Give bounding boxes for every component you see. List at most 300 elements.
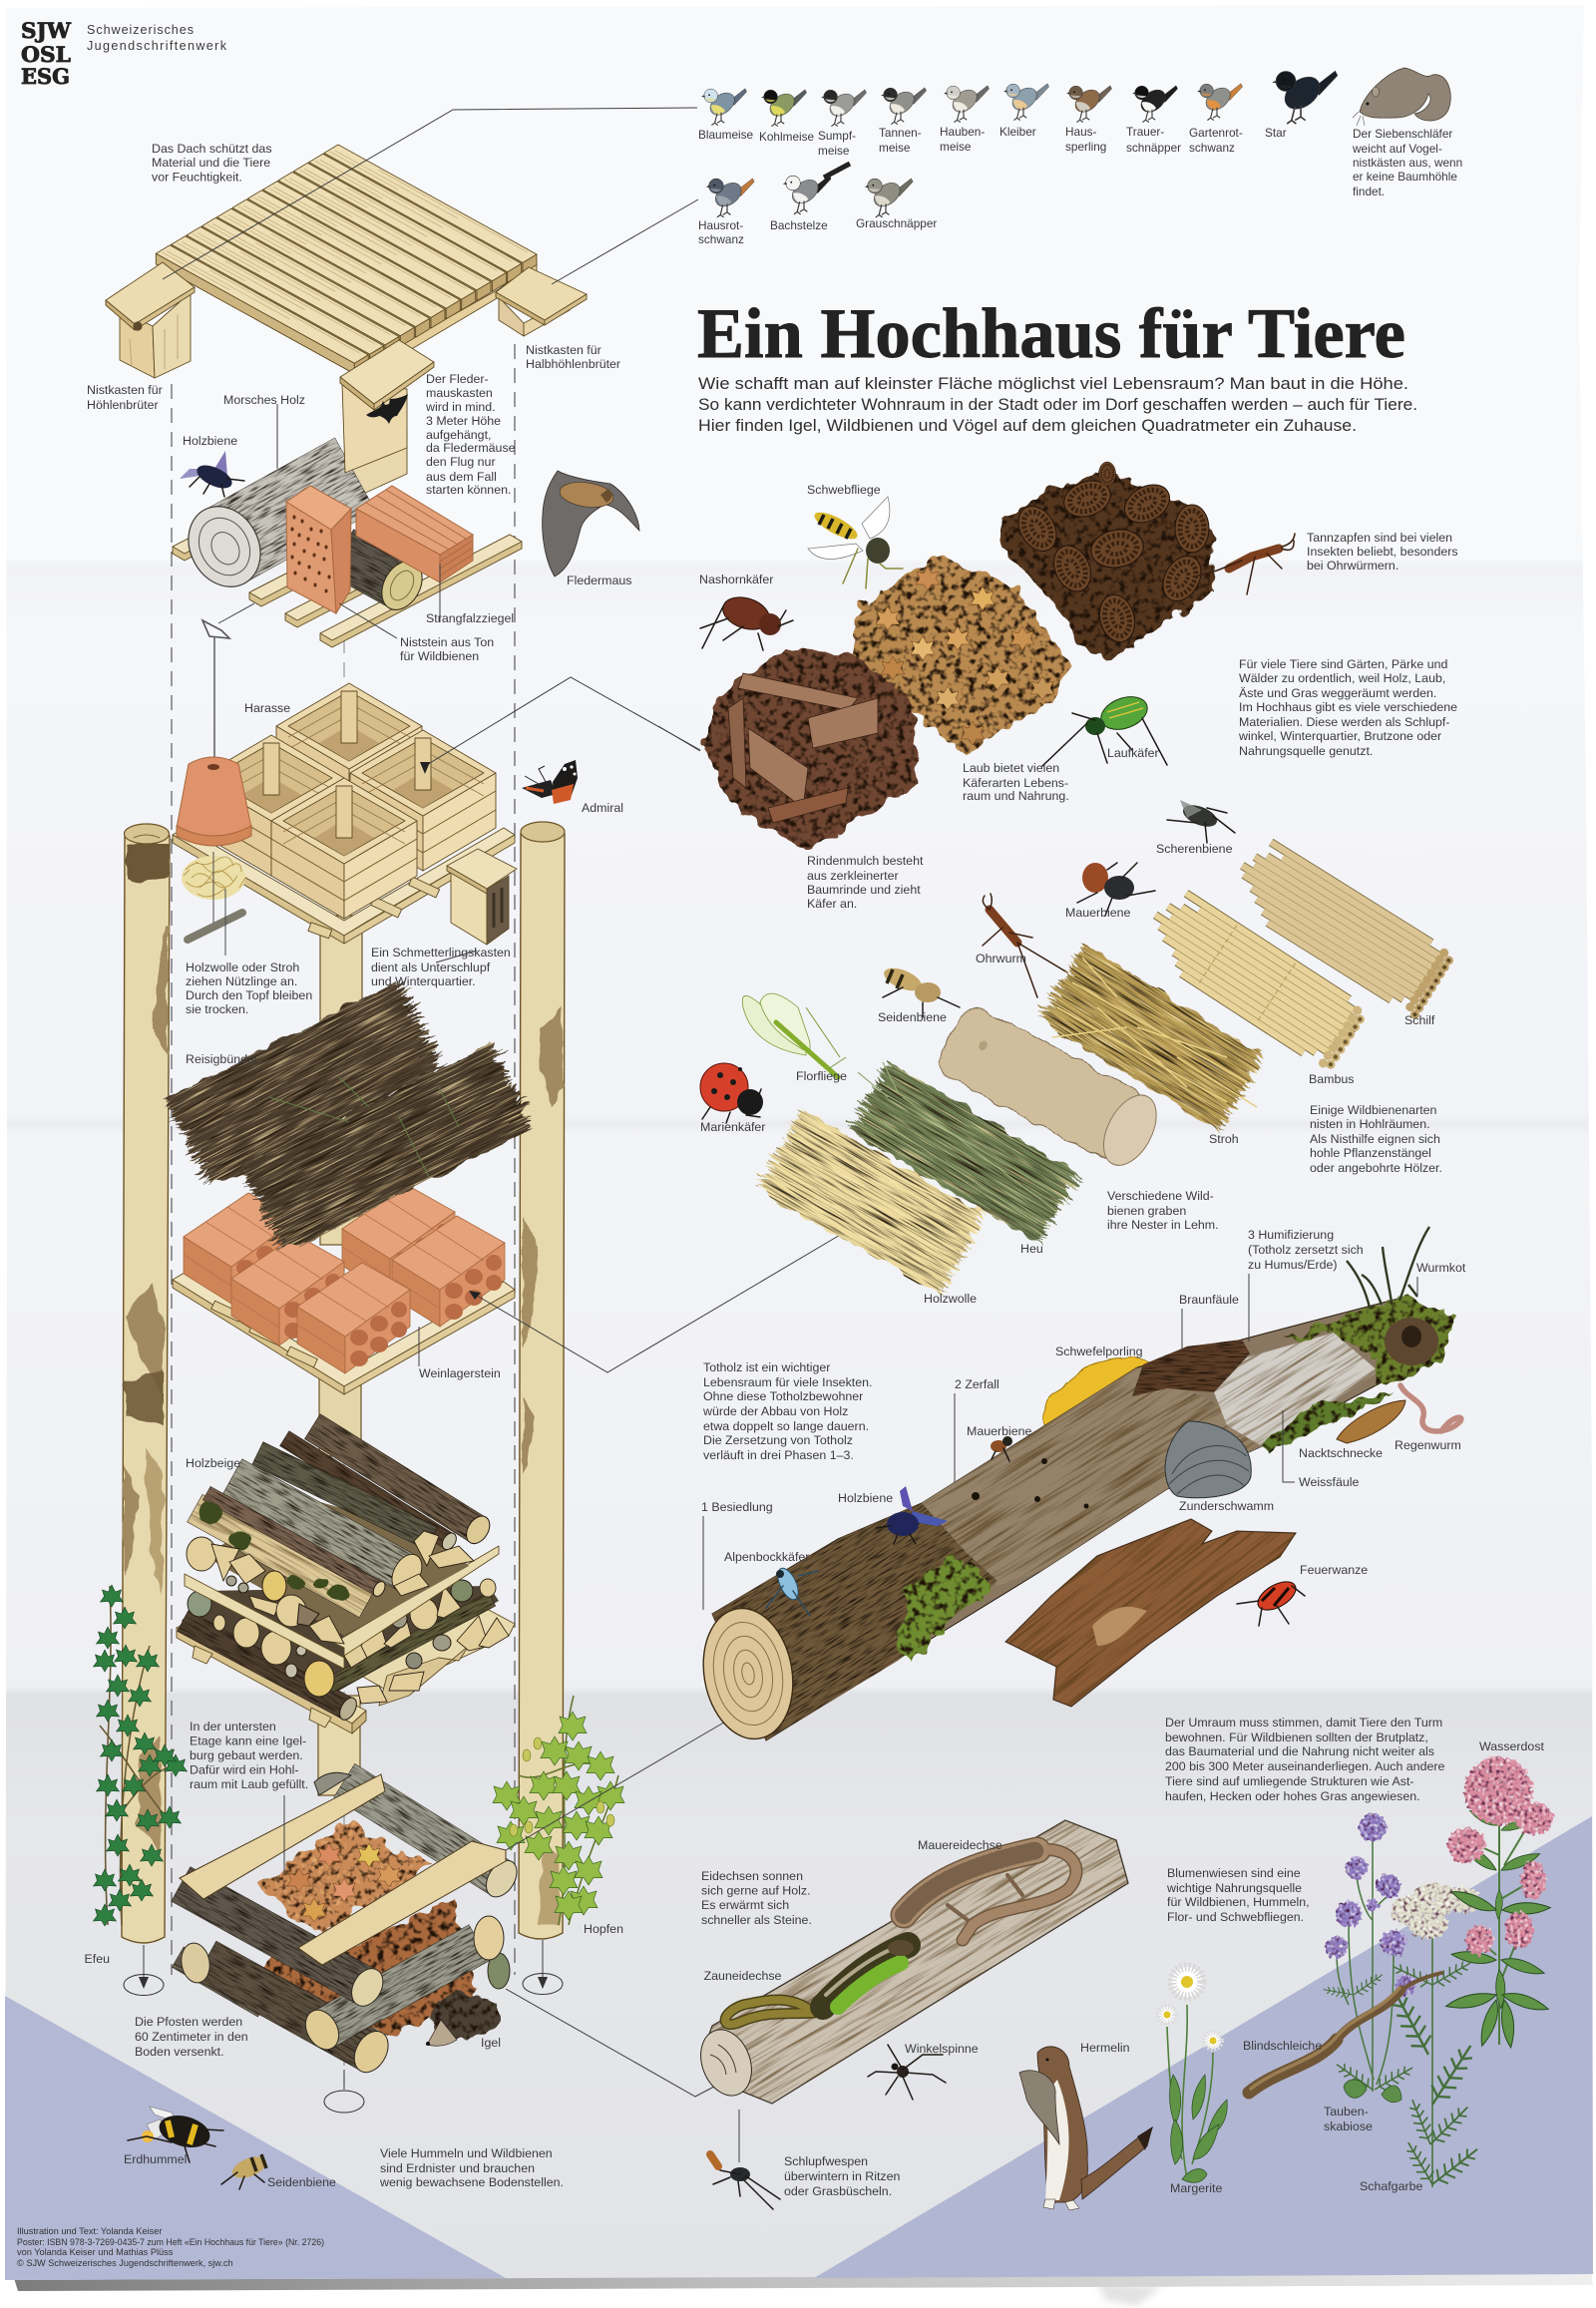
label: Kleiber: Kleiber [999, 125, 1036, 139]
material: Lehm (clay roll) [933, 1001, 1167, 1174]
label: Mauerbiene: Mauerbiene [1065, 906, 1131, 920]
label: Tannzapfen note: bei Ohrwürmern. [1307, 559, 1398, 573]
arrow tips on leader lines [420, 762, 481, 1300]
label: Reisigbündel: Reisigbündel [186, 1052, 257, 1066]
label: Ohrwurm: Ohrwurm [976, 952, 1026, 965]
label: Igelburg note: raum mit Laub gefüllt. [190, 1777, 308, 1791]
insect: Ohrwurm [983, 894, 1067, 997]
label: Taubenskabiose: Tauben- [1324, 2105, 1369, 2118]
credits: © SJW Schweizerisches Jugendschriftenwerk, sjw.ch [17, 2258, 233, 2268]
clay nesting block [286, 486, 351, 613]
label: Bambus: Bambus [1309, 1072, 1354, 1086]
label: Hohlräume note: nisten in Hohlräumen. [1310, 1117, 1430, 1131]
label: Schilf: Schilf [1404, 1013, 1435, 1027]
lower moss [1262, 1392, 1394, 1454]
bat box [340, 340, 434, 473]
label: Winkelspinne: Winkelspinne [905, 2042, 979, 2056]
material: leaves cube [856, 558, 1068, 754]
clay pot with wood wool [177, 757, 251, 956]
worm: Regenwurm [1400, 1385, 1461, 1431]
label: Blindschleiche: Blindschleiche [1243, 2039, 1322, 2053]
label: Heu: Heu [1020, 1242, 1043, 1256]
back logs [333, 1763, 523, 1902]
hedgehog burrow: Igelburg [171, 1763, 523, 2079]
label: Niststein: für Wildbienen [400, 649, 479, 663]
label: Pfosten note: Boden versenkt. [135, 2045, 224, 2059]
insect: Marienkäfer (ladybird) [700, 1063, 763, 1123]
label: Holzwolle note: Durch den Topf bleiben [186, 988, 312, 1002]
white rot [1163, 1259, 1429, 1520]
twig bundles: Reisigbündel [165, 980, 534, 1252]
insect: Mauerbiene [1077, 863, 1155, 916]
lizard log [571, 1633, 1253, 2296]
label: Blumenwiesen note: wichtige Nahrungsquelle [1166, 1881, 1302, 1895]
label: Sumpfmeise: Sumpf- [818, 129, 856, 143]
label: Hausrotschwanz: schwanz [698, 232, 744, 246]
label: roof note: vor Feuchtigkeit. [152, 170, 242, 184]
publisher name: Jugendschriftenwerk [87, 39, 227, 53]
bird: Bachstelze [783, 176, 831, 214]
label: bat box note: den Flug nur [426, 455, 496, 469]
bird: Grauschnäpper [865, 179, 913, 217]
label: Blumenwiesen note: für Wildbienen, Hummeln, [1167, 1895, 1310, 1909]
crates: Harasse [199, 683, 496, 919]
upper front-left log [171, 1866, 389, 2012]
bird: Haubenmeise [944, 86, 990, 123]
label: Erdhummel: Erdhummel [124, 2152, 187, 2166]
plant: Wasserdost [1445, 1756, 1553, 2049]
label: Pfosten note: 60 Zentimeter in den [135, 2030, 248, 2044]
brown rot [1132, 1340, 1250, 1396]
right side lower boards [361, 1609, 515, 1706]
label: Hohlräume note: oder angebohrte Hölzer. [1310, 1161, 1442, 1175]
lizard: Zauneidechse [725, 1940, 914, 2025]
label: Gärten note: Wälder zu ordentlich, weil Holz, Laub, [1239, 671, 1445, 685]
lower tier right ends [344, 1579, 509, 1704]
intro text: So kann verdichteter Wohnraum in der Stadt oder im Dorf geschaffen werden – auch für Tiere. [698, 395, 1417, 414]
material: Bambus [1136, 885, 1369, 1071]
insect: Schlupfwespe [710, 2154, 780, 2209]
logo SJW OSL ESG: SJW [21, 18, 71, 43]
label: Holzwolle note: Holzwolle oder Stroh [186, 961, 299, 974]
label: Kohlmeise: Kohlmeise [759, 130, 815, 144]
label: Trauerschnäpper: Trauer- [1126, 125, 1164, 139]
fungus: Schwefelporling [1044, 1357, 1149, 1428]
label: Holzbiene: Holzbiene [183, 434, 237, 448]
label: Gärten note: Materialien. Diese werden als Schlupf- [1239, 715, 1449, 729]
label: ground nesters note: wenig bewachsene Bodenstellen. [379, 2175, 564, 2189]
label: Pfosten note: Die Pfosten werden [135, 2015, 242, 2029]
label: Humifizierung: (Totholz zersetzt sich [1248, 1243, 1364, 1257]
label: Igelburg note: Dafür wird ein Hohl- [190, 1763, 299, 1777]
lavender ground triangle, bottom left [5, 1996, 506, 2280]
logo SJW OSL ESG: OSL [21, 42, 71, 67]
insect: Nashornkäfer (rhinoceros beetle) [700, 591, 793, 650]
label: Haubenmeise: Hauben- [940, 125, 985, 139]
nest box for semi-cavity breeders [496, 267, 587, 336]
lizard: Mauereidechse [904, 1849, 1076, 1940]
label: bat box note: aufgehängt, [426, 428, 491, 442]
label: Igel: Igel [481, 2036, 501, 2050]
credits: Poster: ISBN 978-3-7269-0435-7 zum Heft «Ein Hochhaus für Tiere» (Nr. 2726) [17, 2237, 324, 2247]
label: Totholz note: Lebensraum für viele Insekten. [703, 1375, 872, 1389]
label: Igelburg note: Etage kann eine Igel- [190, 1733, 306, 1747]
animal: Fledermaus (bat) [543, 471, 639, 577]
bird: Star [1272, 71, 1338, 124]
label: Gartenrotschwanz: schwanz [1189, 141, 1235, 155]
label: Efeu: Efeu [84, 1952, 110, 1966]
label: Blumenwiesen note: Blumenwiesen sind eine [1167, 1866, 1301, 1880]
hops: Hopfen [493, 1696, 624, 1925]
label: Siebenschläfer note: Der Siebenschläfer [1353, 127, 1452, 141]
label: Eidechsen note: sich gerne auf Holz. [701, 1883, 811, 1897]
animal: Igel (hedgehog) [426, 1994, 499, 2046]
bird: Trauerschnäpper [1132, 86, 1178, 123]
label: Blaumeise: Blaumeise [698, 128, 754, 142]
label: Siebenschläfer note: findet. [1353, 185, 1385, 198]
birds row [701, 68, 1450, 217]
moss on log [896, 1553, 994, 1660]
label: ground nesters note: Viele Hummeln und Wildbienen [380, 2146, 553, 2160]
label: Schlupfwespen note: überwintern in Ritzen [784, 2169, 901, 2183]
insect: Seidenbiene on ground [221, 2152, 269, 2189]
label: Nistkasten Halbhöhlenbrüter: Halbhöhlenbrüter [526, 357, 620, 371]
moss patches [200, 1503, 350, 1600]
label: Haubenmeise: meise [940, 140, 972, 154]
label: Totholz note: würde der Abbau von Holz [702, 1404, 848, 1418]
bark section [605, 1374, 1104, 1869]
label: Hopfen: Hopfen [584, 1922, 623, 1936]
lower tier log ends [188, 1591, 334, 1697]
label: Admiral: Admiral [582, 801, 623, 815]
label: Taubenskabiose: skabiose [1324, 2119, 1373, 2133]
label: Holzbeige: Holzbeige [186, 1456, 240, 1470]
label: Holzwolle note: sie trocken. [186, 1002, 248, 1016]
label: Feuerwanze: Feuerwanze [1300, 1563, 1368, 1577]
label: bat box note: da Fledermäuse [426, 441, 516, 455]
post: right [519, 822, 565, 1939]
lower tier body [182, 1586, 499, 1716]
label: Hohlräume note: hohle Pflanzenstängel [1310, 1146, 1431, 1160]
label: Siebenschläfer note: er keine Baumhöhle [1353, 170, 1457, 184]
slug: Nacktschnecke [1337, 1400, 1405, 1443]
bottom pallet of top level [173, 485, 522, 647]
pallet under crates [173, 828, 515, 944]
label: Margerite: Margerite [1170, 2181, 1222, 2195]
label: Umraum note: haufen, Hecken oder hohes Gras angewiesen. [1165, 1789, 1420, 1803]
bird labels [698, 125, 1462, 246]
bird: Haussperling [1066, 86, 1112, 123]
label: Rindenmulch note: Rindenmulch besteht [807, 854, 923, 868]
label: Scherenbiene: Scherenbiene [1156, 842, 1233, 856]
label: Gärten note: Äste und Gras weggeräumt werden. [1239, 686, 1436, 700]
nest box for cavity breeders [106, 262, 195, 378]
insect: Mauerbiene on log [991, 1436, 1012, 1461]
label: Eidechsen note: schneller als Steine. [701, 1913, 812, 1927]
post: centre [318, 916, 362, 1795]
label: Siebenschläfer note: weicht auf Vogel- [1352, 142, 1442, 156]
label: Rindenmulch note: aus zerkleinerter [807, 869, 899, 883]
material: pine cones cube [1002, 462, 1214, 659]
holes in log [972, 1458, 1089, 1508]
insect: Ohrwurm at pine cones [1195, 534, 1295, 594]
insect: Erdhummel (bumblebee) [128, 2107, 223, 2162]
label: ground nesters note: sind Erdnister und brauchen [380, 2161, 535, 2175]
label: bat box note: wird in mind. [425, 400, 496, 414]
label: Zauneidechse: Zauneidechse [704, 1969, 782, 1983]
label: Trauerschnäpper: schnäpper [1126, 141, 1181, 155]
hay details [858, 1062, 1062, 1223]
label: Marienkäfer: Marienkäfer [700, 1120, 765, 1134]
label: Humifizierung: zu Humus/Erde) [1248, 1258, 1338, 1272]
label: Hausrotschwanz: Hausrot- [698, 218, 743, 232]
label: Besiedlung: 1 Besiedlung [701, 1500, 773, 1514]
rotten wood log [175, 438, 376, 599]
leaves on pile [287, 1843, 401, 1922]
label: Fledermaus: Fledermaus [567, 574, 631, 587]
label: Schlupfwespen note: Schlupfwespen [784, 2154, 868, 2168]
insect: Scherenbiene [1167, 800, 1235, 843]
fungus: Zunderschwamm [1165, 1421, 1251, 1498]
pot hanger wire and hook [202, 603, 254, 768]
label: Weinlagerstein: Weinlagerstein [419, 1366, 501, 1380]
label: Morsches Holz: Morsches Holz [223, 393, 305, 407]
bird: Sumpfmeise [821, 90, 867, 127]
label: Niststein: Niststein aus Ton [400, 635, 494, 649]
publisher name: Schweizerisches [87, 23, 194, 37]
label: Stroh: Stroh [1209, 1132, 1239, 1146]
label: Holzwolle note: ziehen Nützlinge an. [186, 974, 297, 988]
insect: Florfliege (lacewing) [742, 993, 846, 1077]
label: Haussperling: Haus- [1065, 125, 1096, 139]
label: Mauerbiene on log: Mauerbiene [967, 1424, 1032, 1438]
post arrow left and ground circle [124, 1945, 164, 1995]
log cut end [693, 1601, 803, 1746]
label: Schwefelporling: Schwefelporling [1055, 1345, 1143, 1358]
label: Wasserdost: Wasserdost [1479, 1739, 1545, 1753]
label: Florfliege: Florfliege [796, 1069, 847, 1083]
label: Umraum note: das Baumaterial und die Nahrung nicht weiter als [1165, 1744, 1434, 1758]
label: Laub note: Käferarten Lebens- [963, 776, 1068, 790]
plant: Margerite [1159, 1967, 1227, 2182]
lower tier dark base log [177, 1610, 360, 1723]
lower leaf filling [249, 1899, 476, 2035]
insect: Seidenbiene [881, 963, 960, 1017]
label: Schlupfwespen note: oder Grasbüscheln. [784, 2184, 892, 2198]
label: Nashornkäfer: Nashornkäfer [699, 573, 773, 586]
label: Tannzapfen note: Tannzapfen sind bei vielen [1307, 531, 1452, 545]
label: Nistkasten Höhlenbrüter: Nistkasten für [87, 383, 163, 397]
label: Nacktschnecke: Nacktschnecke [1299, 1446, 1383, 1460]
label: Umraum note: Tiere sind auf umliegende Strukturen wie Ast- [1165, 1774, 1414, 1788]
butterfly box [436, 849, 517, 962]
label: Lehm note: Verschiedene Wild- [1107, 1189, 1214, 1203]
label: Seidenbiene: Seidenbiene [878, 1010, 947, 1024]
label: Holzbiene on log: Holzbiene [838, 1491, 893, 1505]
label: roof note: Das Dach schützt das [152, 142, 272, 156]
bachstelze long tail [824, 164, 850, 178]
label: Umraum note: Der Umraum muss stimmen, damit Tiere den Turm [1165, 1716, 1442, 1730]
label: Grauschnäpper: Grauschnäpper [856, 216, 937, 230]
label: Nistkasten Höhlenbrüter: Höhlenbrüter [87, 398, 159, 412]
upper tier left ends [187, 1537, 344, 1644]
label: Mauereidechse: Mauereidechse [918, 1838, 1002, 1852]
wine storage bricks: Weinlagerstein [184, 1185, 505, 1373]
label: Tannenmeise: meise [879, 141, 911, 155]
label: Star: Star [1265, 126, 1287, 140]
roof of the tower [156, 145, 537, 385]
log stack: Holzbeige [177, 1413, 515, 1733]
label: Gärten note: winkel, Winterquartier, Brutzone oder [1238, 729, 1441, 743]
label: bat box note: mauskasten [426, 386, 493, 400]
end moss and hollow [1281, 1295, 1453, 1382]
label: Totholz note: Totholz ist ein wichtiger [703, 1360, 830, 1374]
plant: Schafgarbe (yarrow) [1386, 1883, 1483, 2191]
icon: bat silhouette [366, 394, 408, 424]
label: Seidenbiene ground: Seidenbiene [267, 2175, 336, 2189]
material: Schilf (reed bundle) [1223, 836, 1452, 1016]
leader lines [163, 108, 842, 2097]
small dark log [328, 529, 430, 616]
label: Tannenmeise: Tannen- [879, 126, 922, 140]
upper pallet [185, 1496, 499, 1669]
back plate of bat box [345, 429, 407, 502]
tile stack: Strangfalzziegel [356, 486, 473, 582]
dead log: Totholz [605, 1215, 1453, 1869]
stub log behind beams [314, 1772, 351, 1795]
label: Gärten note: Für viele Tiere sind Gärten, Pärke und [1239, 657, 1447, 671]
insect: Holzbiene (carpenter bee) [180, 451, 244, 497]
bird: Kleiber [1003, 84, 1049, 121]
label: Igelburg note: burg gebaut werden. [190, 1748, 303, 1762]
dashed construction guides [172, 344, 515, 2085]
upper leaf pile [255, 1823, 433, 1933]
label: Totholz note: verläuft in drei Phasen 1–3. [703, 1448, 854, 1462]
label: Laub note: raum und Nahrung. [963, 789, 1069, 803]
label: Igelburg note: In der untersten [190, 1720, 276, 1733]
insect: Schwebfliege (hoverfly) [808, 497, 903, 588]
right mossy bark log [325, 1592, 496, 1693]
label: Rindenmulch note: Baumrinde und zieht [807, 883, 921, 897]
label: Totholz note: etwa doppelt so lange dauern. [703, 1419, 869, 1433]
label: Totholz note: Die Zersetzung von Totholz [703, 1433, 853, 1447]
material: bark mulch cube [703, 649, 919, 851]
animal: Blindschleiche (slow worm) [1249, 1973, 1441, 2093]
post: left [122, 824, 170, 1943]
bird: Hausrotschwanz [706, 179, 754, 217]
label: Gärten note: Im Hochhaus gibt es viele verschiedene [1239, 700, 1457, 714]
label: Hohlräume note: Einige Wildbienenarten [1310, 1103, 1436, 1117]
insect: Feuerwanze [1237, 1576, 1305, 1626]
label: Hohlräume note: Als Nisthilfe eignen sich [1310, 1132, 1440, 1146]
insect: Alpenbockkäfer [766, 1565, 818, 1616]
lower right log [299, 1924, 490, 2056]
label: Regenwurm: Regenwurm [1395, 1438, 1461, 1452]
logo SJW OSL ESG [21, 18, 71, 89]
label: Schafgarbe: Schafgarbe [1360, 2179, 1422, 2193]
label: roof note: Material und die Tiere [152, 156, 270, 170]
label: Hermelin: Hermelin [1080, 2041, 1130, 2055]
insect: Holzbiene on log [876, 1486, 948, 1544]
spider: Winkelspinne [868, 2045, 946, 2100]
label: Zunderschwamm: Zunderschwamm [1179, 1499, 1274, 1513]
upper tier logs [304, 1413, 495, 1548]
label: bat box note: starten können. [426, 483, 511, 497]
label: Tannzapfen note: Insekten beliebt, besonders [1307, 545, 1458, 559]
label: bat box note: Der Fleder- [426, 372, 489, 386]
material: Stroh (straw) [1038, 945, 1265, 1131]
lower pallet [177, 1621, 366, 1733]
bird: Tannenmeise [881, 88, 927, 125]
decayed wood section [824, 1215, 1360, 1738]
butterfly: Admiral [522, 760, 578, 804]
material: Heu (hay) [849, 1062, 1080, 1244]
plant: Taubenskabiose [1323, 1813, 1416, 2103]
credits: von Yolanda Keiser und Mathias Plüss [17, 2247, 174, 2257]
label: Braunfäule: Braunfäule [1179, 1293, 1239, 1307]
label: Strangfalzziegel: Strangfalzziegel [426, 611, 514, 625]
label: Sumpfmeise: meise [818, 144, 850, 158]
label: Lehm note: bienen graben [1107, 1204, 1186, 1218]
beam upper [180, 1774, 385, 1899]
label: Alpenbockkäfer: Alpenbockkäfer [724, 1550, 809, 1564]
grass on log [1347, 1227, 1429, 1308]
logo SJW OSL ESG: ESG [21, 64, 70, 89]
intro text: Hier finden Igel, Wildbienen und Vögel auf dem gleichen Quadratmeter ein Zuhause. [698, 416, 1357, 435]
bird: Gartenrotschwanz [1197, 84, 1243, 121]
stoat: Hermelin [1019, 2047, 1153, 2210]
label: bat box note: 3 Meter Höhe [426, 414, 501, 428]
centre post ground circle [324, 2070, 364, 2113]
label: Laufkäfer: Laufkäfer [1107, 746, 1159, 760]
lavender ground triangle, bottom right [814, 1816, 1593, 2278]
right lower edge of upper tier [394, 1546, 474, 1596]
title: Ein Hochhaus für Tiere [697, 295, 1405, 373]
label: Rindenmulch note: Käfer an. [807, 897, 857, 911]
intro text: Wie schafft man auf kleinster Fläche möglichst viel Lebensraum? Man baut in die Höhe. [698, 374, 1408, 393]
bird: Kohlmeise [761, 90, 807, 127]
label: Holzwolle: Holzwolle [924, 1292, 977, 1306]
label: Harasse: Harasse [244, 701, 290, 715]
label: Umraum note: bewohnen. Für Wildbienen sollten der Brutplatz, [1165, 1731, 1428, 1744]
label: Haussperling: sperling [1065, 140, 1106, 154]
label: Gartenrotschwanz: Gartenrot- [1189, 126, 1243, 140]
label: Eidechsen note: Es erwärmt sich [701, 1898, 789, 1912]
credits: Illustration und Text: Yolanda Keiser [17, 2226, 162, 2236]
label: Eidechsen note: Eidechsen sonnen [701, 1869, 803, 1883]
label: Gärten note: Nahrungsquelle genutzt. [1239, 744, 1373, 758]
post arrow right and ground circle [523, 1940, 563, 1995]
material: Holzwolle (wood wool) [757, 1109, 986, 1295]
label: Schwebfliege: Schwebfliege [807, 483, 881, 497]
bird: Blaumeise [701, 89, 747, 126]
label: Wurmkot: Wurmkot [1416, 1261, 1466, 1275]
ivy: Efeu [94, 1585, 188, 1926]
label: Zerfall: 2 Zerfall [955, 1377, 999, 1391]
label: Bachstelze: Bachstelze [770, 218, 828, 232]
label: Lehm note: ihre Nester in Lehm. [1107, 1218, 1219, 1232]
label: Schmetterlingskasten note: und Winterquartier. [371, 974, 476, 988]
animal: Siebenschläfer (dormouse) [1353, 68, 1450, 126]
label: Umraum note: 200 bis 300 Meter auseinanderliegen. Auch andere [1165, 1759, 1444, 1773]
label: Schmetterlingskasten note: dient als Unterschlupf [371, 961, 491, 974]
label: Laub note: Laub bietet vielen [963, 761, 1059, 775]
leader line to Schlupfwespe [738, 2110, 740, 2162]
lower left log [195, 1941, 395, 2079]
label: Totholz note: Ohne diese Totholzbewohner [703, 1389, 863, 1403]
label: Schmetterlingskasten note: Ein Schmetterlingskasten [371, 946, 511, 960]
beam lower [298, 1841, 506, 1965]
